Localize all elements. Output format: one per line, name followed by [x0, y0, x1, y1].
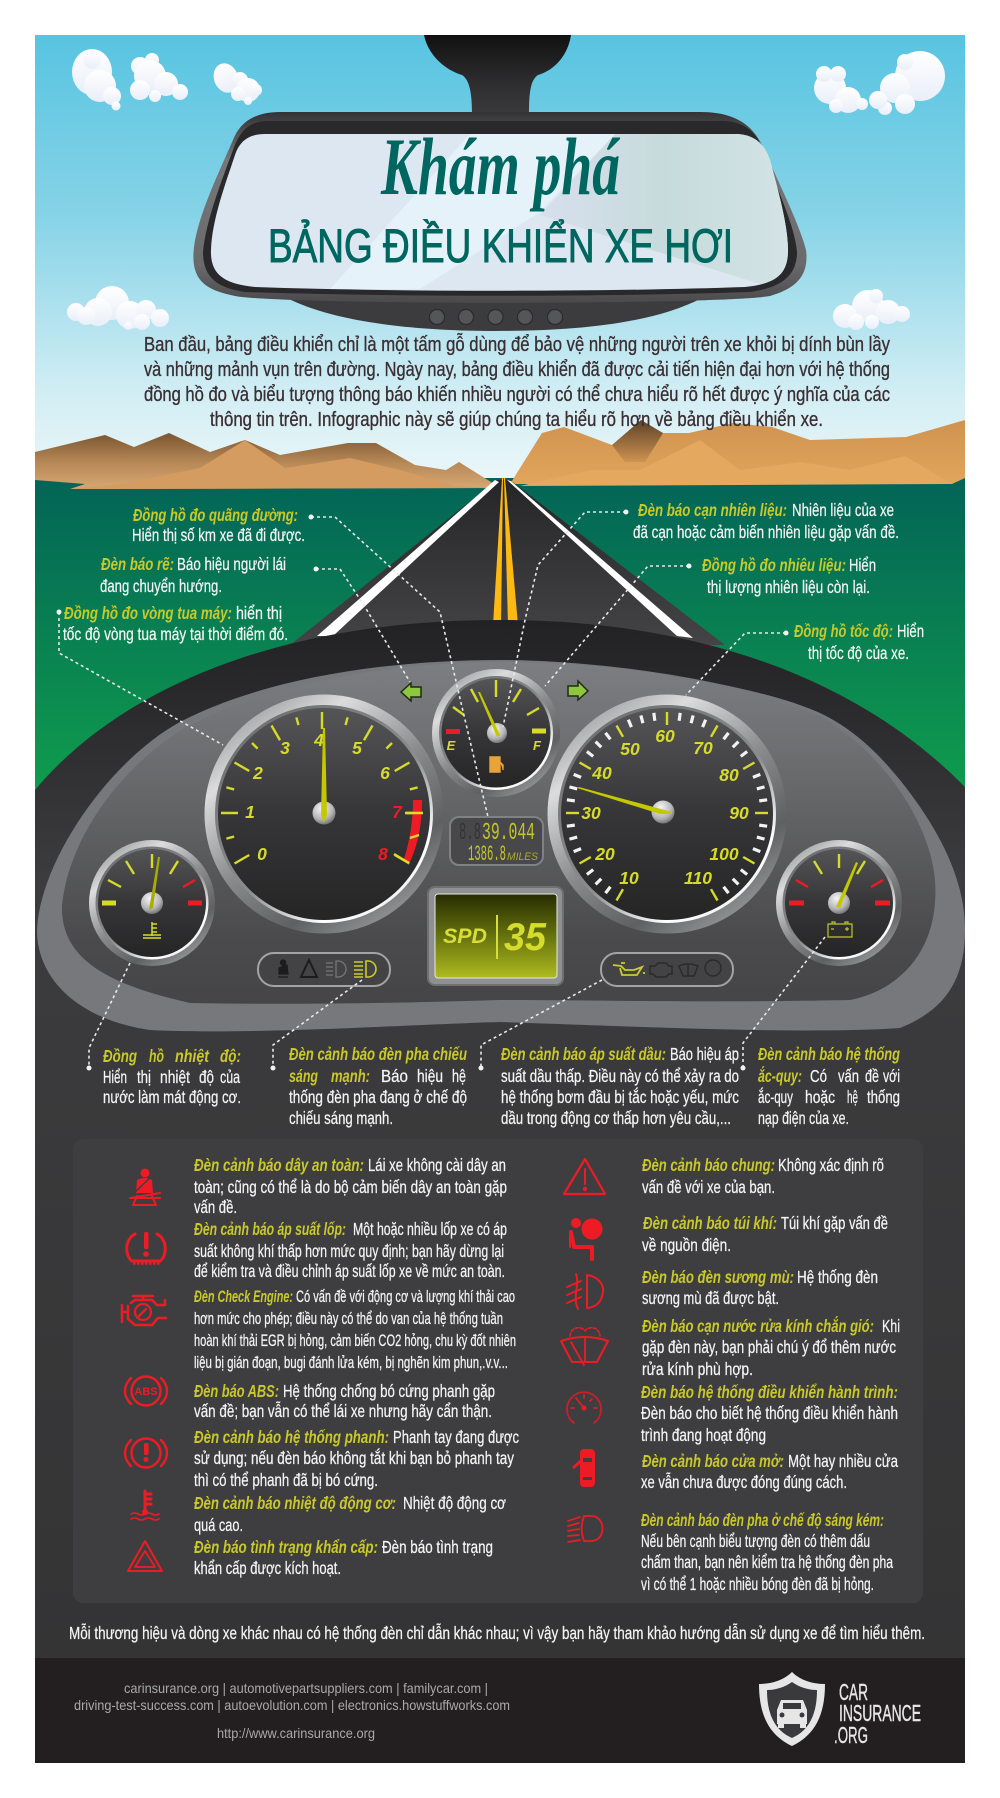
- text: engine temperature: Nhiệt độ động cơ: [403, 1493, 506, 1513]
- logo text: INSURANCE: [839, 1700, 921, 1726]
- speedo numbers: 60: [655, 726, 675, 746]
- odometer display: 1386.8: [468, 842, 506, 867]
- tach pivot and needle: [312, 728, 336, 824]
- speedo minor ticks: [567, 713, 767, 893]
- sources: [74, 1680, 510, 1741]
- callout: coolant temperature: độ: [199, 1067, 214, 1087]
- callout: fuel gauge: Hiển: [849, 555, 876, 575]
- text: ABS: vấn đề; bạn vẫn có thể lái xe nhưng hãy cẩn thận.: [194, 1400, 492, 1421]
- callout: oil pressure: Báo hiệu áp: [670, 1044, 739, 1064]
- odometer display: 8.8: [459, 820, 481, 847]
- tach numbers: 7: [392, 802, 403, 822]
- callout: high beam: Đèn cảnh báo đèn pha chiếu: [289, 1044, 467, 1064]
- icon: cruise small: [705, 960, 721, 976]
- text: cruise control: [641, 1382, 898, 1445]
- text: door open: Đèn cảnh báo cửa mở:: [642, 1451, 784, 1471]
- callout: coolant temperature: nhiệt: [175, 1046, 210, 1066]
- fuel labels: [447, 738, 542, 753]
- speedo numbers: 90: [729, 803, 749, 823]
- icon: fuel pump: [490, 757, 503, 772]
- tach red zone: [404, 800, 422, 864]
- text: check engine: [194, 1288, 516, 1372]
- odometer display: 39.044: [482, 820, 535, 847]
- green ground: [35, 478, 965, 790]
- text: tyre pressure warning: [194, 1219, 507, 1281]
- speedo numbers: 50: [620, 739, 640, 759]
- callout: high beam: sáng: [289, 1066, 318, 1086]
- text: ABS: Hệ thống chống bó cứng phanh gặp: [283, 1381, 495, 1401]
- text: general warning: Đèn cảnh báo chung:: [642, 1155, 775, 1175]
- speed display: SPD: [443, 925, 487, 948]
- icon: cruise control: [567, 1392, 601, 1423]
- intro text: [144, 333, 891, 431]
- sources: carinsurance.org | automotivepartsuppliers.com | familycar.com |: [124, 1680, 488, 1696]
- icon: ABS: ABS: [134, 1386, 158, 1398]
- mirror frame: [193, 112, 807, 303]
- callout: coolant temperature: của: [220, 1067, 240, 1087]
- callout: low fuel: [633, 500, 899, 542]
- sources: http://www.carinsurance.org: [217, 1725, 375, 1741]
- callout: tachometer: [63, 603, 288, 644]
- text: brake system: Đèn cảnh báo hệ thống phanh:: [194, 1427, 389, 1447]
- warning lights pill: left: [258, 953, 390, 986]
- fuel ticks: [453, 680, 546, 731]
- speedo numbers: [581, 726, 749, 888]
- text: general warning: vấn đề với xe của bạn.: [642, 1177, 775, 1197]
- callout: battery: nạp điện của xe.: [758, 1108, 849, 1128]
- callout: battery: với: [883, 1066, 900, 1086]
- text: low beam: Nếu bên cạnh biểu tượng đèn có thêm dấu: [641, 1531, 870, 1551]
- callout: battery: ắc-quy:: [758, 1065, 802, 1086]
- tach numbers: 5: [352, 738, 362, 758]
- text: ABS: Đèn báo ABS:: [194, 1381, 279, 1401]
- odometer display: [450, 817, 543, 867]
- centre lines: [493, 478, 503, 625]
- callout: coolant temperature: [103, 1046, 241, 1107]
- text: low beam: chấm than, bạn nên kiểm tra hệ thống đèn pha: [641, 1552, 893, 1572]
- dashboard grey panel: [37, 660, 965, 1031]
- text: engine temperature: [194, 1493, 506, 1535]
- mirror stalk: [424, 35, 571, 114]
- callout: coolant temperature: thị: [137, 1067, 151, 1087]
- text: seatbelt warning: Đèn cảnh báo dây an toàn:: [194, 1155, 364, 1175]
- text: general warning: [642, 1155, 884, 1197]
- callout: high beam: Báo: [381, 1066, 408, 1086]
- icon: seatbelt: [130, 1168, 160, 1205]
- speedo numbers: 30: [581, 803, 601, 823]
- callout: fuel gauge: thị lượng nhiên liệu còn lại.: [707, 577, 870, 597]
- callout: oil pressure: [501, 1044, 739, 1128]
- icon: temperature: [143, 922, 161, 938]
- mirror bottom housing: [287, 298, 702, 331]
- callout: odometer: Hiển thị số km xe đã đi được.: [132, 525, 305, 545]
- odometer display: MILES: [507, 851, 539, 863]
- text: fog lamp: sương mù đã được bật.: [642, 1288, 779, 1308]
- mirror buttons: [430, 310, 562, 324]
- speedo numbers: 80: [719, 765, 739, 785]
- callout: battery: hệ: [847, 1087, 858, 1107]
- callout: speedometer: thị tốc độ của xe.: [808, 643, 909, 663]
- tach numbers: 8: [378, 844, 388, 864]
- icon: battery: [828, 922, 852, 937]
- text: tyre pressure warning: Đèn cảnh báo áp suất lốp:: [194, 1219, 346, 1239]
- callout: battery: hoặc: [805, 1087, 835, 1107]
- callout: tachometer: hiển thị: [236, 603, 282, 623]
- icon: wiper small: [679, 964, 698, 976]
- callout: low fuel: Đèn báo cạn nhiên liệu:: [638, 500, 787, 520]
- text: hazard: Đèn báo tình trạng: [382, 1537, 493, 1557]
- icon: brake system: [125, 1438, 167, 1468]
- speed display: [428, 887, 563, 985]
- gauge: tachometer: [204, 694, 444, 934]
- text: airbag: về nguồn điện.: [642, 1235, 731, 1255]
- speedo numbers: 70: [693, 738, 713, 758]
- callout: battery: Đèn cảnh báo hệ thống: [758, 1044, 900, 1064]
- text: airbag: Đèn cảnh báo túi khí:: [643, 1213, 777, 1233]
- text: general warning: Không xác định rõ: [778, 1155, 884, 1175]
- text: fog lamp: [642, 1267, 878, 1308]
- callout: odometer: Đồng hồ đo quãng đường:: [133, 505, 298, 525]
- gauge: battery: [776, 840, 902, 966]
- mountains: [35, 420, 965, 489]
- text: hazard: Đèn báo tình trạng khẩn cấp:: [194, 1537, 378, 1557]
- sources: driving-test-success.com | autoevolution.com | electronics.howstuffworks.com: [74, 1697, 510, 1713]
- title: [268, 121, 733, 272]
- text: ABS: [194, 1381, 495, 1421]
- icon: airbag: [570, 1218, 602, 1259]
- fuel labels: F: [533, 738, 542, 753]
- text: door open: Một hay nhiều cửa: [788, 1451, 898, 1471]
- fuel labels: E: [447, 738, 456, 753]
- callout: battery: vấn: [838, 1066, 859, 1086]
- footer band: [35, 1658, 965, 1763]
- icon: low beam: [568, 1516, 602, 1542]
- text: brake system: thì có thể phanh đã bị bó cứng.: [194, 1470, 378, 1490]
- callout: high beam: chiếu sáng mạnh.: [289, 1108, 393, 1128]
- icon: seatbelt small: [278, 960, 288, 977]
- callout: low fuel: đã cạn hoặc cảm biến nhiên liệu gặp vấn đề.: [633, 522, 899, 542]
- text: washer fluid: Đèn báo cạn nước rửa kính chắn gió:: [642, 1315, 874, 1336]
- callout: tachometer: tốc độ vòng tua máy tại thời điểm đó.: [63, 624, 288, 644]
- logo: [759, 1672, 921, 1748]
- logo text: CAR: [839, 1679, 868, 1705]
- text: airbag: Túi khí gặp vấn đề: [781, 1213, 888, 1233]
- callout: oil pressure: suất dầu thấp. Điều này có thể xảy ra do: [501, 1066, 739, 1086]
- speedo numbers: 20: [594, 844, 615, 864]
- callout: speedometer: [794, 621, 924, 663]
- icon: fog lamp: [567, 1274, 603, 1309]
- gauge: speedometer: [548, 694, 786, 934]
- callout: battery: đề: [865, 1066, 879, 1086]
- text: seatbelt warning: Lái xe không cài dây an: [368, 1155, 506, 1175]
- text: brake system: Phanh tay đang được: [393, 1427, 519, 1447]
- callout: battery: [758, 1044, 900, 1128]
- speedo numbers: 10: [619, 868, 639, 888]
- tach numbers: 2: [252, 763, 263, 783]
- callout: oil pressure: dầu trong động cơ thấp hơn yêu cầu,...: [501, 1108, 731, 1128]
- icon: door open: [574, 1449, 595, 1487]
- icon: general warning: [564, 1159, 605, 1194]
- text: hazard: khẩn cấp được kích hoạt.: [194, 1558, 341, 1578]
- icon: engine small: [650, 963, 672, 977]
- text: seatbelt warning: toàn; cũng có thể là do bộ cảm biến dây an toàn gặp: [194, 1177, 507, 1197]
- text: low beam: Đèn cảnh báo đèn pha ở chế độ sáng kém:: [641, 1510, 884, 1530]
- text: washer fluid: rửa kính phù hợp.: [642, 1359, 753, 1379]
- text: fog lamp: Đèn báo đèn sương mù:: [642, 1267, 794, 1287]
- callout: turn signal: Báo hiệu người lái: [177, 554, 286, 574]
- icon: tyre pressure: [127, 1232, 165, 1264]
- callout: oil pressure: hệ thống bơm đầu bị tắc hoặc yếu, mức: [501, 1086, 739, 1107]
- callout: turn signal: Đèn báo rẽ:: [101, 554, 174, 574]
- icon: hazard triangle: [128, 1541, 162, 1571]
- text: brake system: sử dụng; nếu đèn báo không tắt khi bạn bỏ phanh tay: [194, 1447, 514, 1468]
- text: low beam: vì có thể 1 hoặc nhiều bóng đèn đã bị hỏng.: [641, 1574, 874, 1594]
- callout: fuel gauge: Đồng hồ đo nhiêu liệu:: [702, 555, 846, 575]
- dashboard outer band: [35, 620, 965, 1660]
- callout: fuel gauge: [702, 555, 876, 597]
- text: washer fluid: gặp đèn này, bạn phải chú ý đổ thêm nước: [642, 1337, 896, 1357]
- icon: hazard small: [301, 960, 317, 977]
- speedo major ticks: [566, 712, 768, 900]
- text: washer fluid: Khi: [882, 1316, 900, 1336]
- text: check engine: Có vấn đề với động cơ và lượng khí thải cao: [296, 1288, 515, 1306]
- text: brake system: [194, 1427, 519, 1490]
- tach numbers: 1: [245, 802, 255, 822]
- icon: low beam small: [326, 961, 346, 977]
- icon: engine temperature: [131, 1491, 159, 1520]
- title: BẢNG ĐIỀU KHIỂN XE HƠI: [268, 219, 733, 272]
- text: cruise control: trình đang hoạt động: [641, 1425, 766, 1445]
- logo text: [834, 1679, 921, 1748]
- intro text: thông tin trên. Infographic này sẽ giúp chúng ta hiểu rõ hơn về bảng điều khiển xe.: [210, 408, 823, 431]
- clouds: [67, 49, 945, 330]
- callout: high beam: [289, 1044, 467, 1128]
- panel: sky background: [35, 35, 965, 485]
- warning lights pill: right: [601, 953, 733, 986]
- text: tyre pressure warning: để kiểm tra và điều chỉnh áp suất lốp xe về mức an toàn.: [194, 1261, 505, 1281]
- callout: turn signal: [100, 554, 286, 596]
- speedo numbers: 110: [684, 868, 712, 888]
- callout: coolant temperature: độ:: [220, 1046, 241, 1066]
- callout: oil pressure: Đèn cảnh báo áp suất dầu:: [501, 1044, 666, 1064]
- panel: warning lights legend: [73, 1139, 923, 1603]
- text: hazard: [194, 1537, 493, 1578]
- icon: oil can small: [613, 963, 644, 975]
- speedo numbers: 40: [591, 763, 612, 783]
- logo shield: [759, 1672, 825, 1746]
- tach numbers: 6: [380, 763, 390, 783]
- logo text: .ORG: [834, 1722, 868, 1748]
- speed display: 35: [504, 916, 547, 959]
- text: cruise control: Đèn báo hệ thống điều khiển hành trình:: [641, 1382, 898, 1402]
- text: door open: [641, 1451, 898, 1492]
- icon: washer fluid: [561, 1328, 608, 1365]
- gauge: fuel: [432, 669, 560, 797]
- text: tyre pressure warning: Một hoặc nhiều lốp xe có áp: [353, 1219, 507, 1239]
- text: seatbelt warning: [194, 1155, 507, 1217]
- text: seatbelt warning: vấn đề.: [194, 1197, 237, 1217]
- icon: high beam small: [354, 961, 376, 977]
- tach numbers: [245, 730, 403, 864]
- icon: ABS: [125, 1376, 167, 1406]
- callout: battery: Có: [810, 1066, 827, 1086]
- text: engine temperature: Đèn cảnh báo nhiệt độ động cơ:: [194, 1493, 396, 1513]
- tach numbers: 0: [257, 844, 267, 864]
- callout: low fuel: Nhiên liệu của xe: [792, 500, 894, 520]
- callout: battery: ắc-quy: [758, 1086, 793, 1107]
- mirror glass: [211, 134, 788, 291]
- callout: speedometer: Đồng hồ tốc độ:: [794, 621, 893, 641]
- text: tyre pressure warning: suất không khí thấp hơn mức quy định; bạn hãy dừng lại: [194, 1241, 504, 1261]
- gauge: coolant temperature: [89, 840, 215, 966]
- callout: coolant temperature: Hiển: [103, 1067, 127, 1087]
- text: door open: xe vẫn chưa được đóng đúng cách.: [641, 1471, 847, 1492]
- text: check engine: Đèn Check Engine:: [194, 1288, 293, 1306]
- callout: high beam: mạnh:: [331, 1066, 370, 1086]
- callout: high beam: hiệu: [417, 1066, 443, 1086]
- callout: battery: thống: [867, 1087, 900, 1107]
- turn signal arrows: [401, 681, 588, 701]
- text: washer fluid: [642, 1315, 900, 1379]
- text: engine temperature: quá cao.: [194, 1515, 243, 1535]
- speedo pivot and needle: [577, 787, 674, 824]
- road: [290, 478, 725, 645]
- text: low beam: [641, 1510, 893, 1594]
- callout: odometer: [132, 505, 305, 545]
- text: airbag: [642, 1213, 888, 1255]
- callout: coolant temperature: Đồng: [103, 1046, 137, 1066]
- speedo numbers: 100: [709, 844, 739, 864]
- tach numbers: 3: [280, 738, 290, 758]
- callout: coolant temperature: nước làm mát động cơ.: [103, 1087, 241, 1107]
- mirror: [193, 35, 807, 331]
- leader lines: [56, 510, 825, 1070]
- text: check engine: hoàn khí thải EGR bị hỏng, cảm biến CO2 hỏng, chu kỳ đốt nhiên: [194, 1332, 516, 1350]
- icon: check engine: [122, 1296, 166, 1325]
- text: cruise control: Đèn báo cho biết hệ thống điều khiển hành: [641, 1403, 898, 1423]
- callout: high beam: hệ: [452, 1066, 466, 1086]
- tach ticks: [221, 712, 423, 864]
- text: check engine: liệu bị gián đoạn, bugi đánh lửa kém, bị nghẽn kim phun,.v.v...: [194, 1354, 508, 1372]
- callout: coolant temperature: hồ: [149, 1046, 164, 1066]
- text: fog lamp: Hệ thống đèn: [797, 1267, 878, 1287]
- callout: turn signal: đang chuyển hướng.: [100, 576, 222, 596]
- callout: tachometer: Đồng hồ đo vòng tua máy:: [64, 603, 232, 623]
- callout: coolant temperature: nhiệt: [160, 1067, 190, 1087]
- callout: high beam: thống đèn pha đang ở chế độ: [289, 1087, 467, 1107]
- callout: speedometer: Hiển: [897, 621, 924, 641]
- tach numbers: 4: [313, 730, 324, 750]
- title: Khám phá: [380, 121, 621, 212]
- text: check engine: hơn mức cho phép; điều này có thể do van của hệ thống tuần: [194, 1310, 503, 1328]
- road edge lines: [317, 480, 499, 636]
